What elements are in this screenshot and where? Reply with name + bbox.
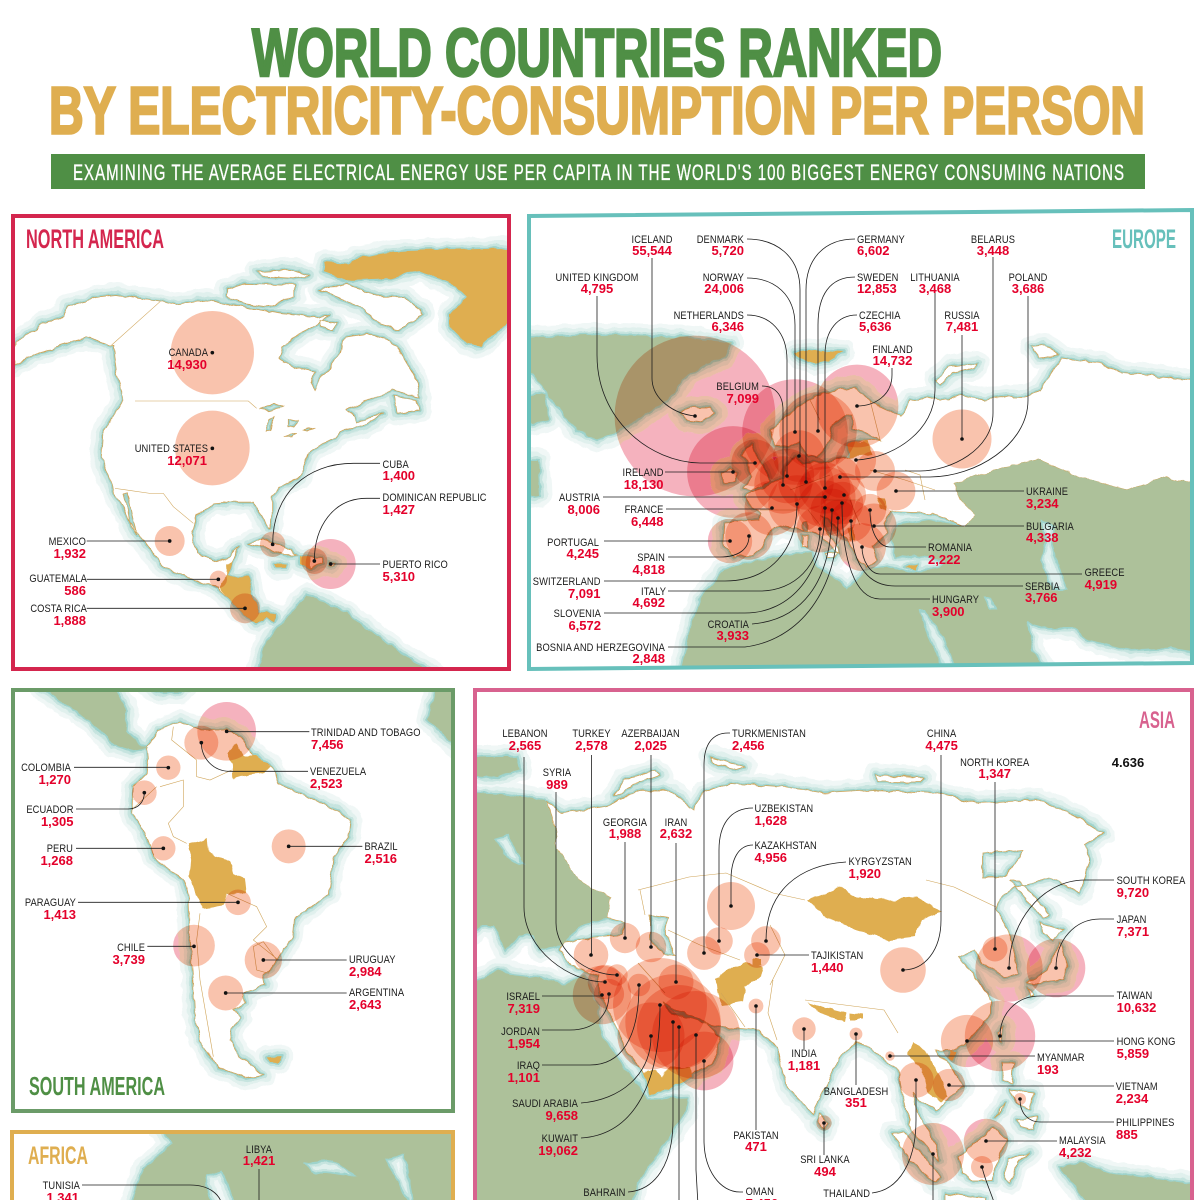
labels: asia: 1,101 [507, 1070, 540, 1085]
panel: europe [522, 208, 1200, 678]
labels: asia: 2,578 [575, 738, 608, 753]
labels: asia: 4,232 [1059, 1145, 1092, 1160]
labels: asia: CHINA [927, 728, 956, 740]
labels: south america: 7,456 [311, 737, 344, 752]
labels: south america: 3,739 [112, 952, 145, 967]
labels: north america: GUATEMALA [29, 573, 87, 585]
labels: asia: UZBEKISTAN [754, 803, 813, 815]
labels: europe: UNITED KINGDOM [555, 272, 639, 284]
labels: europe: DENMARK [697, 234, 744, 246]
labels: asia: 2,456 [732, 738, 765, 753]
labels: north america: 1,400 [382, 468, 415, 483]
labels: europe: 4,919 [1085, 577, 1117, 592]
labels: europe: IRELAND [623, 467, 664, 479]
labels: asia: 471 [745, 1139, 767, 1154]
labels: asia: LEBANON [502, 728, 548, 740]
labels: south america: URUGUAY [349, 954, 396, 966]
labels: europe: 6,602 [857, 243, 890, 258]
labels: europe: BULGARIA [1026, 521, 1074, 533]
labels: europe: 6,346 [711, 319, 744, 334]
labels: asia: 9,720 [1117, 885, 1149, 900]
leader lines and dots: north america [87, 351, 380, 610]
labels: south america: 1,305 [41, 814, 74, 829]
labels: europe: 18,130 [624, 477, 664, 492]
labels: north america: MEXICO [49, 536, 86, 548]
labels: asia: 5,859 [1117, 1046, 1149, 1061]
labels: south america: CHILE [117, 942, 145, 954]
labels: europe: 12,853 [857, 281, 897, 296]
labels: south america: 2,643 [349, 997, 382, 1012]
labels: asia: JAPAN [1117, 914, 1146, 926]
labels: europe: 4,692 [632, 595, 665, 610]
labels: europe: HUNGARY [932, 594, 979, 606]
labels: europe: ICELAND [632, 234, 673, 246]
labels: europe: 8,006 [567, 502, 600, 517]
labels: north america [29, 347, 487, 628]
map: europe with bubbles [531, 238, 1190, 666]
labels: south america: ARGENTINA [349, 987, 404, 999]
labels: asia: PAKISTAN [733, 1130, 779, 1142]
leader lines: africa [82, 1169, 259, 1200]
labels: south america: BRAZIL [365, 841, 398, 853]
labels: asia: 4,956 [754, 850, 787, 865]
labels: asia: 19,062 [538, 1143, 578, 1158]
labels: asia: GEORGIA [603, 817, 647, 829]
labels: asia: 1,347 [978, 766, 1011, 781]
labels: europe: 3,900 [932, 604, 965, 619]
frame: africa [12, 1132, 453, 1200]
labels: europe: SWITZERLAND [533, 576, 601, 588]
labels: europe: 7,099 [726, 391, 759, 406]
leader lines and dots: south america [74, 729, 362, 995]
labels: asia: 2,565 [509, 738, 541, 753]
labels: asia: 2,025 [634, 738, 667, 753]
labels: asia: MYANMAR [1037, 1052, 1085, 1064]
labels: europe: 24,006 [704, 281, 744, 296]
labels: asia: MALAYSIA [1059, 1135, 1106, 1147]
labels: south america: COLOMBIA [21, 762, 71, 774]
labels: asia: 193 [1037, 1062, 1059, 1077]
labels: europe: GREECE [1085, 567, 1125, 579]
labels: asia: JORDAN [501, 1026, 540, 1038]
labels: asia: 989 [546, 777, 568, 792]
labels: europe: 3,234 [1026, 496, 1059, 511]
labels: north america: 14,930 [167, 357, 207, 372]
labels: europe: NETHERLANDS [674, 310, 744, 322]
labels: asia: AZERBAIJAN [621, 728, 680, 740]
map: asia with bubbles [477, 732, 1190, 1200]
labels: asia: SRI LANKA [800, 1154, 850, 1166]
labels: south america: 2,984 [349, 964, 382, 979]
labels: asia: 7,319 [507, 1001, 540, 1016]
labels: africa: 1,421 [243, 1153, 275, 1168]
labels: europe: 5,720 [711, 243, 744, 258]
labels: europe: FRANCE [625, 504, 663, 516]
frame: north america [13, 216, 509, 669]
labels: europe: 4,338 [1026, 530, 1059, 545]
panel: asia [470, 690, 1200, 1200]
labels: asia: 2,234 [1116, 1091, 1149, 1106]
labels: asia: 10,632 [1117, 1000, 1156, 1015]
labels: asia: KYRGYZSTAN [848, 856, 912, 868]
labels: asia: TAJIKISTAN [811, 950, 863, 962]
labels: europe: 4,245 [566, 546, 599, 561]
labels: africa [43, 1144, 275, 1200]
labels: europe: 3,766 [1025, 590, 1058, 605]
labels: asia: 4,475 [925, 738, 958, 753]
labels: europe: 2,848 [632, 651, 665, 666]
labels: europe: UKRAINE [1026, 486, 1068, 498]
subtitle banner [51, 154, 1145, 189]
labels: europe: 5,636 [859, 319, 892, 334]
labels: europe: 7,481 [946, 319, 978, 334]
labels: europe: BOSNIA AND HERZEGOVINA [536, 642, 665, 654]
labels: europe: GERMANY [857, 234, 905, 246]
labels: europe: 4,795 [581, 281, 613, 296]
labels: south america: TRINIDAD AND TOBAGO [311, 727, 421, 739]
labels: north america: PUERTO RICO [383, 559, 448, 571]
labels: north america: 586 [64, 583, 86, 598]
labels: south america: 1,270 [38, 772, 71, 787]
frame: asia [475, 690, 1192, 1200]
labels: europe: 2,222 [928, 552, 961, 567]
labels: asia: IRAQ [517, 1060, 540, 1072]
labels: europe: SPAIN [637, 552, 665, 564]
labels: europe: 4,818 [632, 562, 665, 577]
labels: asia: KUWAIT [542, 1133, 579, 1145]
labels: asia: THAILAND [823, 1188, 870, 1200]
labels: europe: 6,448 [631, 514, 664, 529]
map: south america with bubbles [30, 692, 451, 1090]
labels: north america: DOMINICAN REPUBLIC [383, 492, 487, 504]
labels: europe: 7,091 [568, 586, 600, 601]
labels: europe: FINLAND [872, 344, 913, 356]
labels: asia: 1,628 [754, 813, 787, 828]
labels: europe: 3,686 [1012, 281, 1044, 296]
labels: asia: 1,988 [609, 826, 641, 841]
labels: asia: SAUDI ARABIA [512, 1098, 578, 1110]
map: africa [82, 1134, 451, 1200]
labels: europe: CZECHIA [859, 310, 901, 322]
labels: europe: ITALY [641, 586, 666, 598]
labels: europe: BELGIUM [716, 381, 759, 393]
labels: south america: VENEZUELA [310, 766, 366, 778]
labels: europe: 55,544 [632, 243, 673, 258]
labels: asia: 2,632 [660, 826, 692, 841]
labels: south america: 1,268 [40, 853, 73, 868]
labels: asia: 494 [814, 1164, 837, 1179]
heading: south america: SOUTH AMERICA [29, 1071, 165, 1101]
labels: europe: BELARUS [971, 234, 1015, 246]
labels: europe: ROMANIA [928, 542, 972, 554]
labels: europe: SWEDEN [857, 272, 898, 284]
labels: north america: COSTA RICA [30, 603, 87, 615]
labels: europe: PORTUGAL [547, 537, 599, 549]
labels: asia: TURKMENISTAN [732, 728, 806, 740]
labels: asia: 1,181 [788, 1058, 820, 1073]
labels: europe: 3,468 [919, 281, 951, 296]
labels: asia: NORTH KOREA [960, 757, 1029, 769]
labels: europe: AUSTRIA [559, 492, 600, 504]
labels: north america: 1,427 [382, 502, 415, 517]
labels: asia: OMAN [746, 1186, 774, 1198]
labels: south america: PARAGUAY [25, 897, 76, 909]
labels: north america: CANADA [169, 347, 208, 359]
labels: europe: POLAND [1009, 272, 1048, 284]
labels: africa: LIBYA [246, 1144, 272, 1156]
labels: asia: PHILIPPINES [1116, 1117, 1174, 1129]
labels: south america: 2,523 [310, 776, 343, 791]
labels: europe: 3,933 [716, 628, 749, 643]
labels: south america: ECUADOR [26, 804, 74, 816]
labels: asia: 1,920 [848, 866, 881, 881]
frame: south america [13, 690, 453, 1111]
map: north america with bubbles [13, 216, 513, 673]
labels: asia: 7,371 [1117, 924, 1149, 939]
labels: asia: 351 [845, 1095, 867, 1110]
labels: asia: 1,954 [507, 1036, 541, 1051]
labels: asia: INDIA [791, 1048, 817, 1060]
frame: europe [529, 210, 1192, 669]
labels: south america: 2,516 [364, 851, 397, 866]
labels: asia [501, 728, 1185, 1200]
labels: north america: 1,888 [53, 613, 86, 628]
labels: asia: 9,658 [545, 1108, 578, 1123]
labels: europe: SLOVENIA [554, 608, 601, 620]
labels: north america: 5,310 [382, 569, 415, 584]
labels: north america: 1,932 [53, 546, 86, 561]
labels: asia: VIETNAM [1116, 1081, 1158, 1093]
labels: africa: TUNISIA [43, 1180, 80, 1192]
panel: north america [13, 216, 513, 673]
labels: europe: CROATIA [708, 619, 749, 631]
panel: south america [13, 683, 458, 1111]
labels: europe: 14,732 [873, 353, 912, 368]
labels: asia: ISRAEL [506, 991, 540, 1003]
labels: asia: IRAN [665, 817, 687, 829]
labels: asia: TURKEY [572, 728, 611, 740]
labels: north america: UNITED STATES [135, 443, 208, 455]
labels: europe: 6,572 [568, 618, 601, 633]
labels: asia: TAIWAN [1117, 990, 1152, 1002]
labels: north america: CUBA [383, 459, 409, 471]
labels: south america: 1,413 [43, 907, 76, 922]
heading: africa: AFRICA [28, 1142, 88, 1170]
labels: asia: BAHRAIN [583, 1187, 626, 1199]
leader lines and dots: asia [524, 733, 1114, 1200]
labels: asia: SOUTH KOREA [1117, 875, 1185, 887]
labels: south america [21, 727, 421, 1012]
labels: asia: HONG KONG [1117, 1036, 1175, 1048]
labels: europe [533, 234, 1125, 666]
panel: africa [12, 1125, 470, 1200]
title [49, 15, 1145, 148]
labels: asia: 1,440 [811, 960, 844, 975]
labels: europe: RUSSIA [944, 310, 980, 322]
leader lines and dots: europe [597, 239, 1082, 647]
labels: south america: PERU [47, 843, 73, 855]
labels: asia: SYRIA [543, 767, 571, 779]
heading: north america: NORTH AMERICA [26, 224, 164, 254]
labels: north america: 12,071 [167, 453, 207, 468]
labels: asia: KAZAKHSTAN [754, 840, 817, 852]
labels: europe: SERBIA [1025, 581, 1060, 593]
labels: asia: BANGLADESH [824, 1086, 888, 1098]
unlabelled figure: 4.636 [1112, 755, 1144, 770]
labels: europe: 3,448 [977, 243, 1009, 258]
labels: europe: LITHUANIA [910, 272, 960, 284]
labels: europe: NORWAY [703, 272, 744, 284]
heading: asia: ASIA [1139, 707, 1175, 734]
labels: asia: 885 [1116, 1127, 1138, 1142]
